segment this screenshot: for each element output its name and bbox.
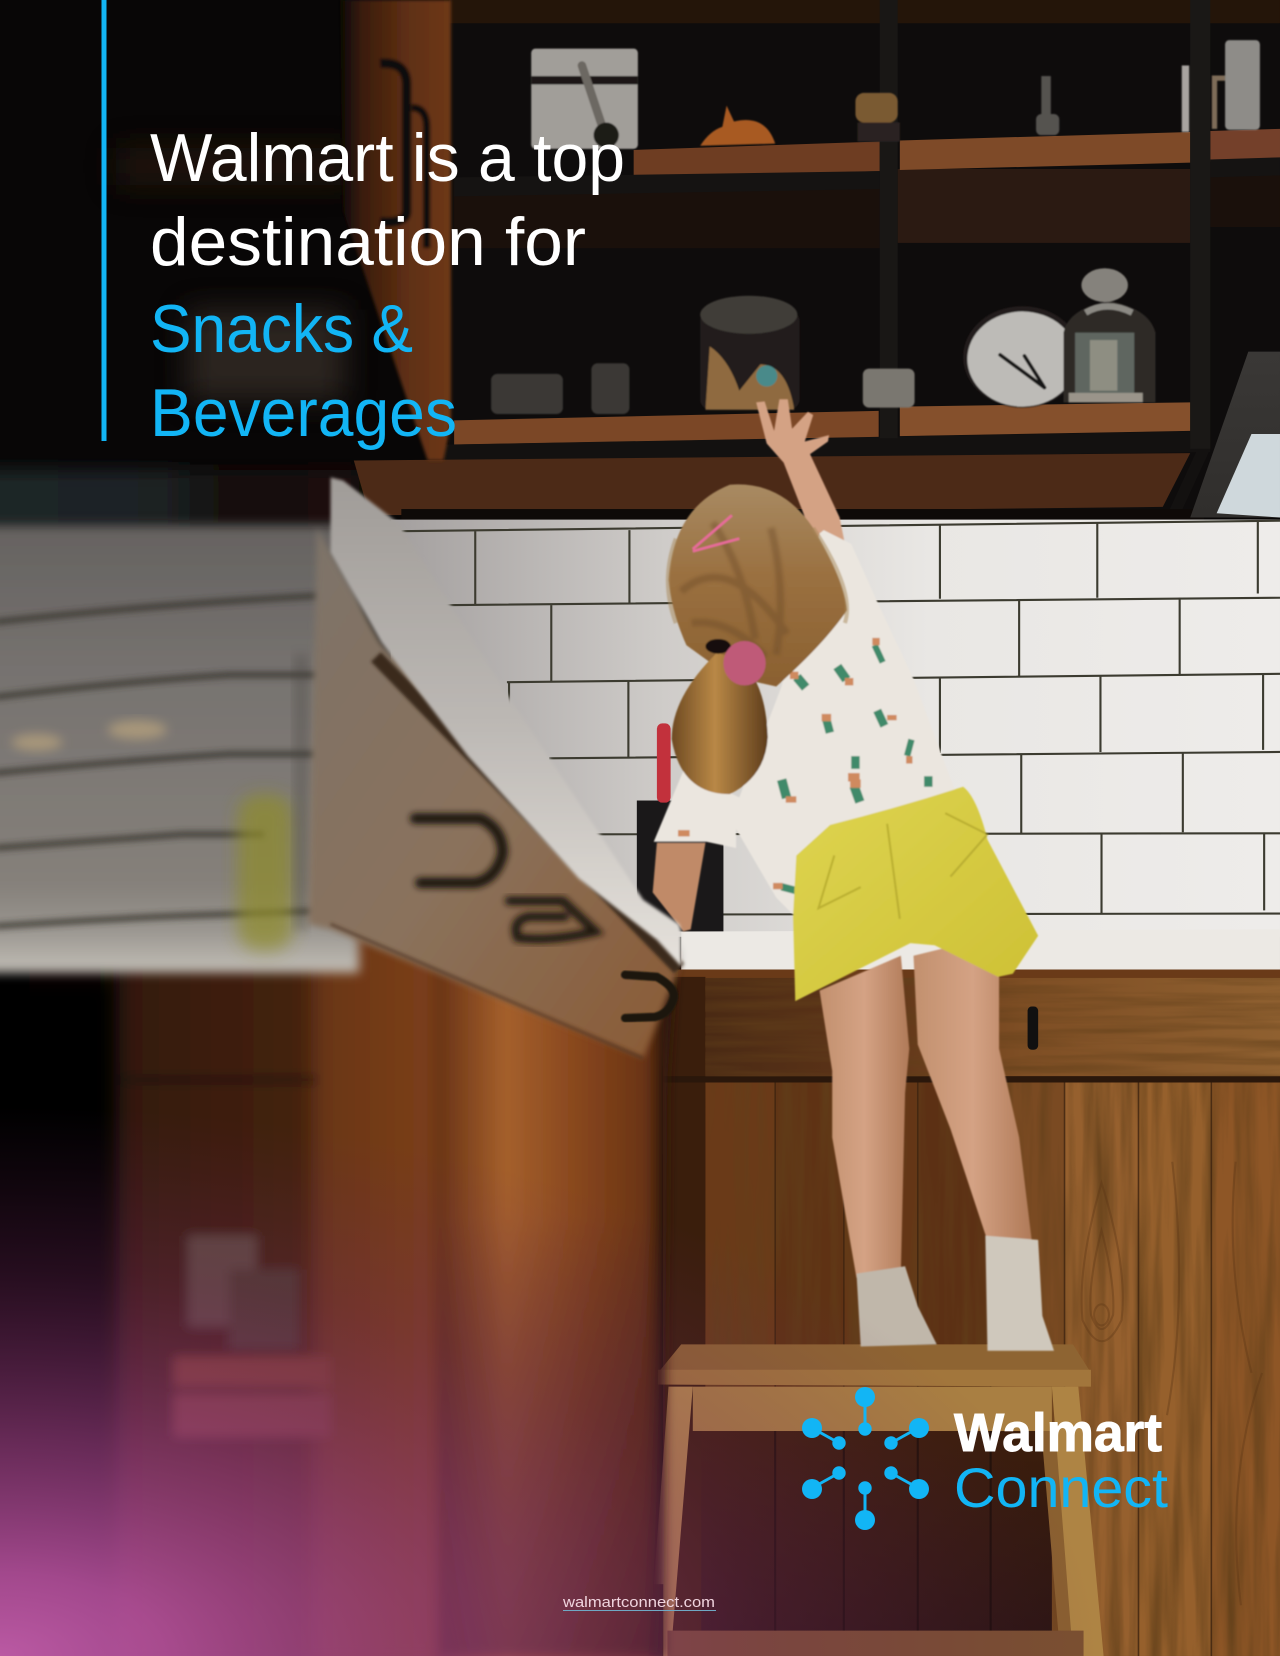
ponytail xyxy=(672,653,768,794)
tile backsplash xyxy=(391,520,1280,937)
blurred haze above grey fronts xyxy=(0,470,359,528)
upper cabinet dark backing xyxy=(0,0,1280,528)
blurred foreground cabinet xyxy=(0,477,681,1656)
logo icon: network spark xyxy=(802,1387,929,1530)
logo wordmark Connect: Connect xyxy=(954,1456,1168,1519)
foreground wood cabinet xyxy=(0,908,676,1656)
pink glow bottom left xyxy=(0,1106,1100,1656)
grey front grooves xyxy=(0,596,358,926)
utensil holder xyxy=(637,723,723,931)
title xyxy=(150,120,625,451)
shelving unit xyxy=(354,0,1280,525)
stool xyxy=(648,1344,1104,1656)
foreground grey stacked fronts xyxy=(0,525,359,973)
panel lower seam xyxy=(331,924,643,1058)
item: wall clock xyxy=(963,306,1081,408)
foreground drawer handles xyxy=(415,818,674,1018)
shirt cactus print xyxy=(678,638,933,894)
lower cabinets xyxy=(663,969,1280,1656)
black left edge of wood xyxy=(0,982,111,1656)
item: steel pitcher and rod xyxy=(1182,40,1260,132)
cupboard door, blurred foreground xyxy=(340,0,451,460)
hair tie and scrunchie xyxy=(705,639,766,685)
shelf items xyxy=(491,40,1260,414)
shorts pockets xyxy=(818,813,987,919)
hair strands xyxy=(681,523,787,657)
foreground angled cabinet front xyxy=(308,528,679,1058)
item: glass pitcher xyxy=(1036,76,1059,135)
drawer handle xyxy=(1028,1006,1038,1050)
hair wisps xyxy=(668,528,847,623)
legs xyxy=(820,935,1032,1278)
hair clips xyxy=(693,515,739,551)
logo: Walmart Connect xyxy=(802,1387,1168,1530)
raised arm and hand xyxy=(756,399,845,544)
website link: walmartconnect.com xyxy=(562,1594,715,1611)
shorts xyxy=(793,787,1038,1001)
wood underlay reaching the page bottom xyxy=(0,1584,663,1656)
item: grey box with handle xyxy=(531,49,638,149)
item: cookie jar xyxy=(700,296,799,410)
item: orange pig figure xyxy=(700,106,775,146)
title line 4: Beverages xyxy=(150,375,457,451)
item: lantern xyxy=(1063,268,1155,402)
blue accent bar xyxy=(102,0,106,441)
blurred yellow object xyxy=(238,794,293,950)
foreground white counter edge xyxy=(331,477,681,966)
title line 2: destination for xyxy=(150,204,586,280)
grey front amber glows xyxy=(12,720,167,751)
shirt xyxy=(654,530,956,915)
left arm xyxy=(653,843,705,931)
blurred haze upper left xyxy=(116,148,354,400)
item: glass jar xyxy=(863,369,915,408)
logo wordmark Walmart: Walmart xyxy=(954,1403,1162,1463)
socks xyxy=(856,1236,1054,1351)
dark seam below counter xyxy=(376,657,679,968)
counter top xyxy=(681,929,1280,972)
range hood xyxy=(1190,352,1280,517)
title line 3: Snacks & xyxy=(150,291,413,367)
soft vertical seam xyxy=(294,655,308,929)
item: jars on the left xyxy=(491,363,629,414)
hair xyxy=(669,484,847,686)
title line 1: Walmart is a top xyxy=(150,120,625,196)
item: small jar xyxy=(855,93,900,142)
wood knot grain xyxy=(1082,1162,1262,1605)
girl xyxy=(653,399,1054,1351)
